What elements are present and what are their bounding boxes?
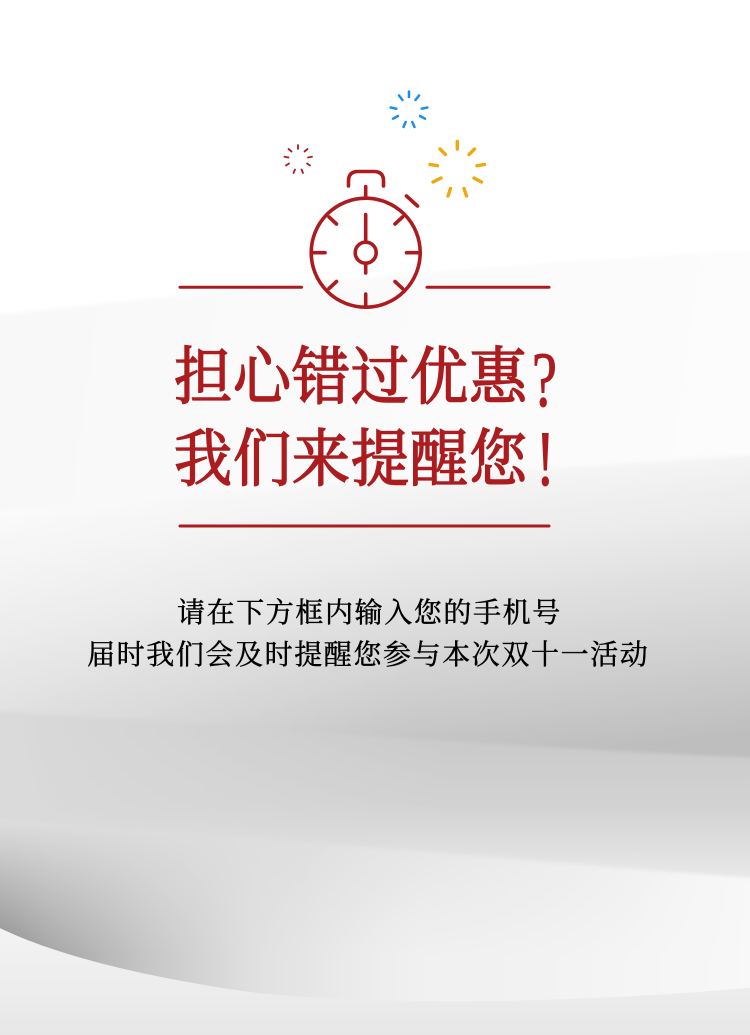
icon: blue firework: [391, 92, 427, 127]
icon: gold firework: [430, 142, 484, 196]
text: instruction line 1: 请在下方框内输入您的手机号: [177, 598, 562, 629]
icon: stopwatch: [311, 172, 420, 307]
text: instruction line 2: 届时我们会及时提醒您参与本次双十一活动: [87, 640, 649, 671]
divider: rule under title: [180, 524, 549, 528]
divider: left rule: [180, 286, 302, 289]
icon: red firework: [284, 145, 312, 173]
title: 担心错过优惠: [174, 342, 528, 413]
divider: right rule: [427, 286, 549, 289]
title: 我们来提醒您: [174, 424, 528, 495]
title: ?: [532, 336, 557, 423]
title: !: [536, 415, 555, 502]
title: [174, 336, 557, 502]
icon: stopwatch with fireworks and side rules: [178, 90, 550, 528]
